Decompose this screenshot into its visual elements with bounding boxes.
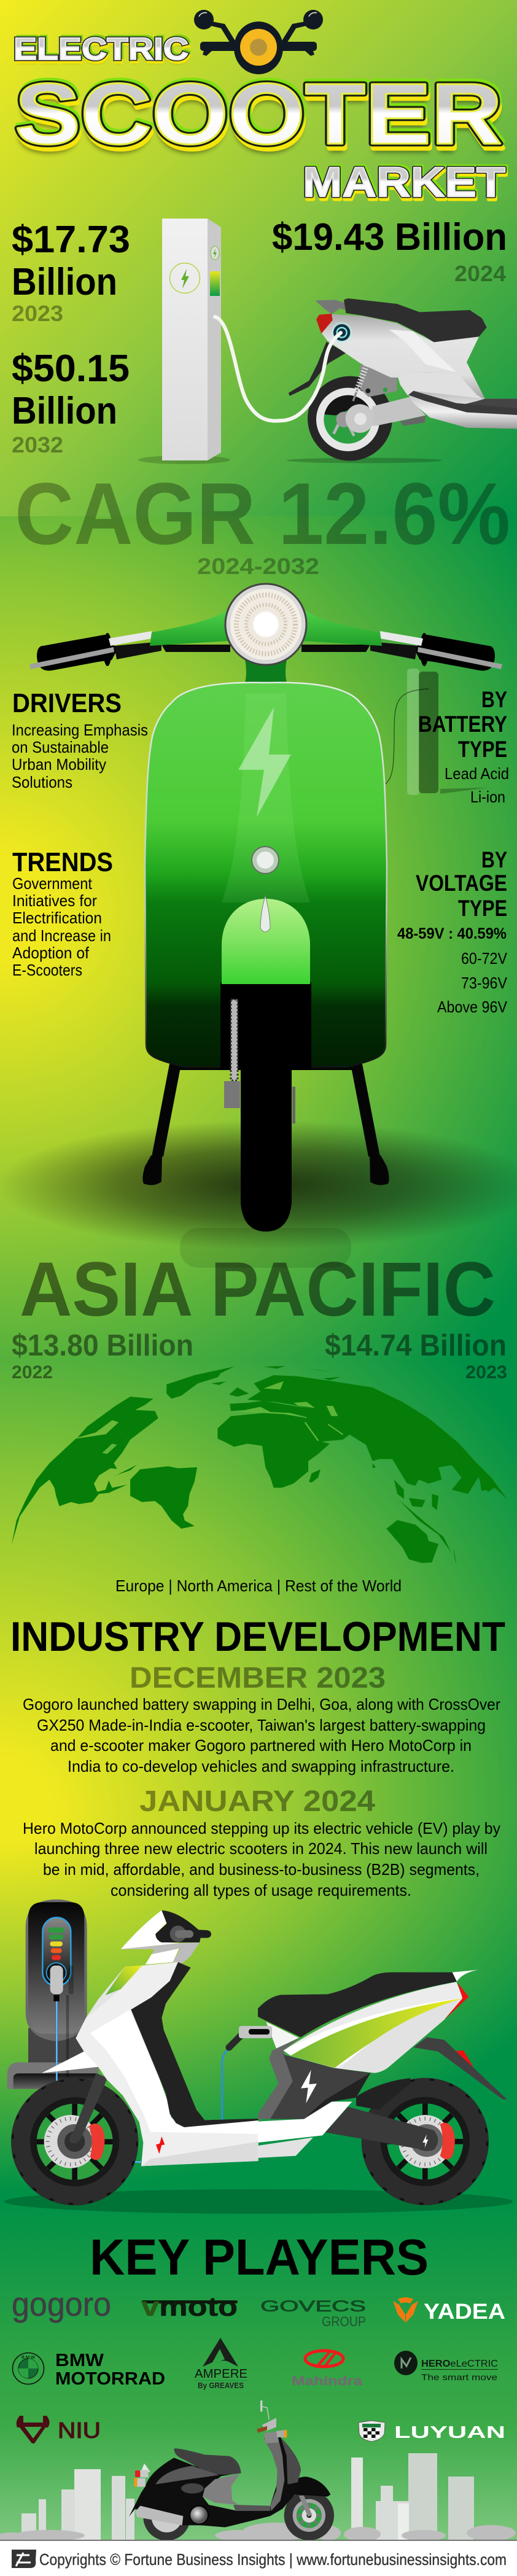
development: January 2024: JANUARY 2024 (139, 1785, 375, 1818)
trends text: E-Scooters (12, 961, 82, 979)
charging station illustration (138, 219, 341, 464)
market value stats (12, 216, 507, 457)
panel: trends: TRENDS (12, 847, 113, 877)
voltage segments: 73-96V (461, 974, 508, 992)
panel: trends (12, 847, 113, 979)
title word: SCOOTER: SCOOTER (15, 65, 502, 162)
fork (299, 2496, 312, 2517)
voltage segments: Above 96V (437, 998, 508, 1016)
front fender (222, 899, 310, 984)
side panel (203, 2474, 239, 2505)
title word: SCOOTER: SCOOTER (15, 74, 504, 171)
body shield (145, 683, 387, 1067)
rear tail (413, 2037, 507, 2100)
panel: by voltage type: TYPE (458, 896, 507, 921)
rear body (284, 1982, 462, 2073)
CAGR: 2024-2032 (197, 554, 319, 579)
swing arm (325, 2107, 438, 2151)
drivers text: Urban Mobility (12, 755, 106, 774)
neck (244, 657, 287, 685)
voltage segments: 48-59V : 40.59% (397, 925, 507, 942)
illustration: scooter charging, front half (7, 1899, 258, 2205)
trends text: Government (12, 874, 93, 893)
title word: SCOOTER: SCOOTER (16, 63, 503, 160)
trends text: and Increase in (12, 926, 111, 945)
trends text (12, 874, 111, 979)
logo: bmw motorrad: BMW (55, 2351, 104, 2370)
footer (0, 2540, 517, 2576)
stat 2024: $19.43 Billion (272, 216, 507, 258)
dark body panel (258, 2037, 370, 2119)
charging post (7, 1899, 98, 2089)
floor panel (258, 2101, 352, 2143)
December text: Gogoro launched battery swapping in Delhi, Goa, along with CrossOver (23, 1695, 500, 1713)
drivers text: Solutions (12, 773, 72, 791)
title: Electric Scooter Market (14, 10, 507, 209)
logo: hero electric: The smart move (421, 2372, 497, 2382)
title word: SCOOTER: SCOOTER (17, 69, 504, 166)
body (129, 2437, 301, 2528)
world map globe (12, 1366, 507, 1565)
logo: yadea: YADEA (424, 2300, 505, 2324)
logos: key players (12, 2285, 505, 2443)
logo: hero electric: HEROeLeCTRIC (421, 2359, 498, 2369)
December text: GX250 Made-in-India e-scooter, Taiwan's largest battery-swapping (37, 1716, 486, 1734)
mudguard (289, 342, 346, 396)
logo: gogoro: gogoro (12, 2285, 111, 2323)
panel: by voltage type: BY (481, 847, 507, 872)
title word: ELECTRIC: ELECTRIC (15, 29, 190, 64)
logo: ampere: By GREAVES (198, 2381, 244, 2390)
logo: mahindra: Mahindra (292, 2375, 363, 2388)
panel: by battery type: BY (481, 687, 507, 712)
arm bolt (422, 2135, 428, 2147)
logo: vmoto: vmoto (141, 2292, 238, 2322)
panel: by battery type: TYPE (458, 737, 507, 762)
charging cable (215, 317, 341, 421)
ground shadow under big scooter (4, 2189, 513, 2214)
logo: hero electric (394, 2351, 498, 2382)
blue cable (56, 2001, 141, 2162)
seat (258, 1973, 457, 2037)
December text (23, 1695, 500, 1775)
trends text: Initiatives for (12, 891, 97, 910)
panel: by battery type (418, 687, 509, 806)
illustration: scooter charging, rear half (258, 1969, 507, 2205)
tyre (220, 982, 311, 1232)
plug cable (222, 2050, 227, 2120)
logo: bmw motorrad: BMW (21, 2354, 36, 2360)
footboard (408, 391, 517, 429)
stat 2032: 2032 (12, 432, 63, 457)
trends text: Electrification (12, 909, 102, 927)
logo: niu (17, 2416, 101, 2443)
charging plug (229, 2026, 272, 2047)
red reflector (456, 2050, 474, 2068)
tail red trim (444, 1982, 468, 2020)
stat 2032 (12, 347, 130, 457)
stat 2032: Billion (12, 390, 117, 432)
rear wheel (308, 376, 392, 461)
front wheel (11, 2073, 138, 2205)
headlight (225, 584, 306, 665)
title word: MARKET: MARKET (305, 157, 507, 204)
stat 2023: Billion (12, 261, 117, 303)
muffler (135, 2505, 209, 2525)
title word: SCOOTER: SCOOTER (15, 65, 502, 162)
other regions: Europe | North America | Rest of the World (115, 1577, 402, 1595)
panel bolt (301, 2070, 317, 2103)
shield (233, 2438, 301, 2511)
tail tip (453, 1969, 478, 1982)
logo: bmw motorrad: MOTORRAD (55, 2369, 165, 2389)
development: December 2023 (23, 1662, 500, 1775)
stat 2023: $17.73 (12, 219, 130, 261)
stat 2032: $50.15 (12, 347, 130, 390)
handlebar icon (194, 10, 323, 74)
ground shadow under front scooter (0, 1120, 517, 1268)
wheel hub (336, 404, 374, 433)
trees (0, 2523, 516, 2542)
January text: considering all types of usage requirements. (111, 1881, 411, 1899)
body panel (321, 314, 485, 402)
rear cowl (155, 2466, 219, 2494)
trends text: Adoption of (12, 944, 90, 962)
logo: luyuan (359, 2421, 505, 2442)
under-seat panel (266, 2022, 299, 2049)
stat 2024: 2024 (454, 261, 506, 286)
shock bracket (360, 364, 397, 397)
heading: key players: KEY PLAYERS (90, 2229, 429, 2286)
suspension spring (353, 365, 367, 401)
title word: MARKET: MARKET (303, 158, 505, 206)
small scooter rear wheel (143, 2494, 190, 2540)
value 2022: 2022 (12, 1362, 53, 1383)
battery segments: Li-ion (470, 788, 505, 806)
logo: govecs: GOVECS (260, 2298, 366, 2315)
fender (293, 2477, 330, 2497)
logo: mahindra (292, 2351, 363, 2388)
voltage segments (397, 925, 508, 1016)
windshield panel (86, 1966, 142, 2018)
title word: ELECTRIC: ELECTRIC (15, 34, 190, 69)
voltage segments: 60-72V (461, 949, 508, 968)
value 2023 (325, 1329, 507, 1383)
region: Asia Pacific: ASIA PACIFIC (20, 1247, 496, 1332)
value 2022 (12, 1329, 193, 1383)
January text: Hero MotoCorp announced stepping up its electric vehicle (EV) play by (23, 1819, 500, 1837)
small black scooter (129, 2400, 334, 2540)
logo: niu: NIU (58, 2418, 101, 2443)
value 2022: $13.80 Billion (12, 1329, 193, 1362)
battery segments: Lead Acid (445, 764, 509, 783)
region: Asia Pacific (12, 1247, 507, 1383)
seat (344, 298, 487, 342)
title word: MARKET: MARKET (304, 161, 507, 209)
value 2023: 2023 (465, 1362, 507, 1383)
December text: and e-scooter maker Gogoro partnered with Hero MotoCorp in (50, 1736, 472, 1755)
scooter head (121, 1911, 211, 1965)
January text: be in mid, affordable, and business-to-business (B2B) segments, (43, 1860, 480, 1879)
front button (252, 847, 279, 874)
logo: bmw motorrad (12, 2351, 165, 2389)
logo: yadea (393, 2297, 505, 2324)
battery charger watermark (386, 669, 488, 795)
January text (23, 1819, 500, 1899)
drivers text: on Sustainable (12, 738, 109, 756)
small scooter front wheel (284, 2491, 334, 2540)
logo: govecs: GROUP (322, 2314, 366, 2329)
December text: India to co-develop vehicles and swapping infrastructure. (68, 1757, 454, 1775)
tail lamp (316, 314, 333, 333)
charge port (331, 322, 352, 343)
drivers text: Increasing Emphasis (12, 721, 148, 739)
logo: ampere (195, 2338, 247, 2390)
small scooter handlebar (257, 2400, 287, 2443)
logo: ampere: AMPERE (195, 2367, 247, 2381)
fork detail (224, 999, 295, 1123)
logo: govecs (260, 2298, 366, 2329)
rear fender (356, 2078, 410, 2110)
front scooter illustration (29, 584, 502, 1232)
rear wheel (362, 2078, 489, 2205)
fender ornament (260, 896, 270, 932)
dark inner strip (131, 1962, 258, 2127)
rack (315, 300, 360, 314)
January text: launching three new electric scooters in 2024. This new launch will (34, 1839, 488, 1858)
stat 2024 (272, 216, 507, 286)
swing arm (368, 397, 426, 425)
development: January 2024 (23, 1785, 500, 1899)
logo: luyuan: LUYUAN (394, 2423, 505, 2442)
lightning bolt (238, 707, 291, 817)
drivers text (12, 721, 148, 791)
stands (142, 1064, 389, 1185)
panel: drivers: DRIVERS (12, 688, 122, 718)
rear scooter illustration (287, 298, 517, 463)
red bolt (156, 2136, 165, 2154)
main white body (42, 1962, 258, 2166)
title word: ELECTRIC: ELECTRIC (14, 31, 189, 66)
seat (174, 2448, 241, 2475)
development: December 2023: DECEMBER 2023 (130, 1662, 386, 1694)
handlebar left (29, 609, 230, 671)
stat 2023 (12, 219, 130, 326)
footer logo (12, 2550, 36, 2568)
stat 2023: 2023 (12, 301, 63, 326)
handlebar right (301, 609, 502, 671)
title word: ELECTRIC: ELECTRIC (14, 31, 189, 66)
title word: ELECTRIC: ELECTRIC (15, 34, 190, 69)
tail lights (134, 2464, 150, 2487)
value 2023: $14.74 Billion (325, 1329, 507, 1362)
panel: drivers (12, 688, 148, 791)
city skyline (0, 2453, 516, 2542)
panel: by voltage type (397, 847, 508, 1016)
title word: MARKET: MARKET (303, 158, 505, 206)
battery segments (445, 764, 509, 806)
